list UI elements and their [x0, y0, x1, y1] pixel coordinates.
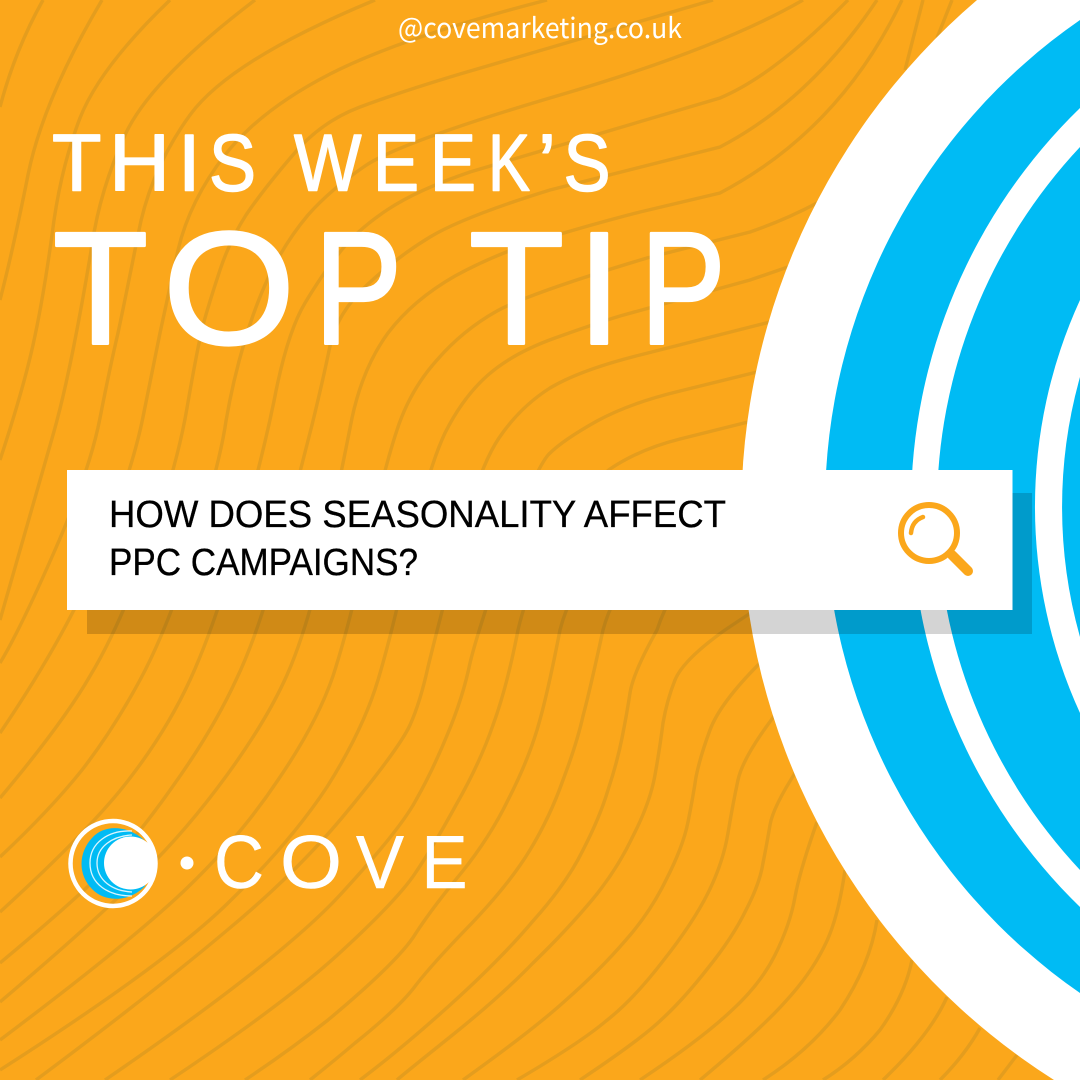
question text: PPC CAMPAIGNS?	[109, 542, 418, 584]
heading: this week's: K	[488, 118, 530, 208]
question text: HOW DOES SEASONALITY AFFECT	[109, 494, 726, 536]
heading: this week's: E	[373, 118, 419, 208]
heading: top tip: P	[640, 198, 726, 378]
heading: top tip: T	[53, 198, 148, 378]
heading: this week's: S	[209, 118, 256, 208]
heading: this week's: H	[109, 118, 170, 208]
heading: this week's: ’	[538, 118, 556, 208]
concentric target rings	[741, 0, 1080, 1080]
heading: top tip: O	[163, 198, 295, 378]
search bar shadow	[87, 493, 1032, 634]
heading: top tip: I	[577, 198, 621, 378]
logo wordmark: V	[356, 820, 404, 904]
heading: this week's: T	[52, 118, 101, 208]
website handle: @covemarketing.co.uk	[398, 7, 683, 47]
logo mark	[70, 821, 157, 906]
logo wordmark: C	[214, 820, 264, 904]
heading: this week's: E	[430, 118, 476, 208]
heading: this week's: I	[178, 118, 201, 208]
cove logo	[70, 820, 468, 906]
logo wordmark: E	[422, 820, 468, 904]
heading: top tip: T	[469, 198, 564, 378]
heading: this week's: W	[294, 118, 362, 208]
logo dot	[180, 856, 194, 870]
heading: this week's: S	[564, 118, 610, 208]
logo wordmark: O	[280, 820, 342, 904]
heading: top tip: P	[314, 198, 400, 378]
icon: magnifying glass	[901, 505, 968, 571]
search bar	[67, 470, 1012, 610]
